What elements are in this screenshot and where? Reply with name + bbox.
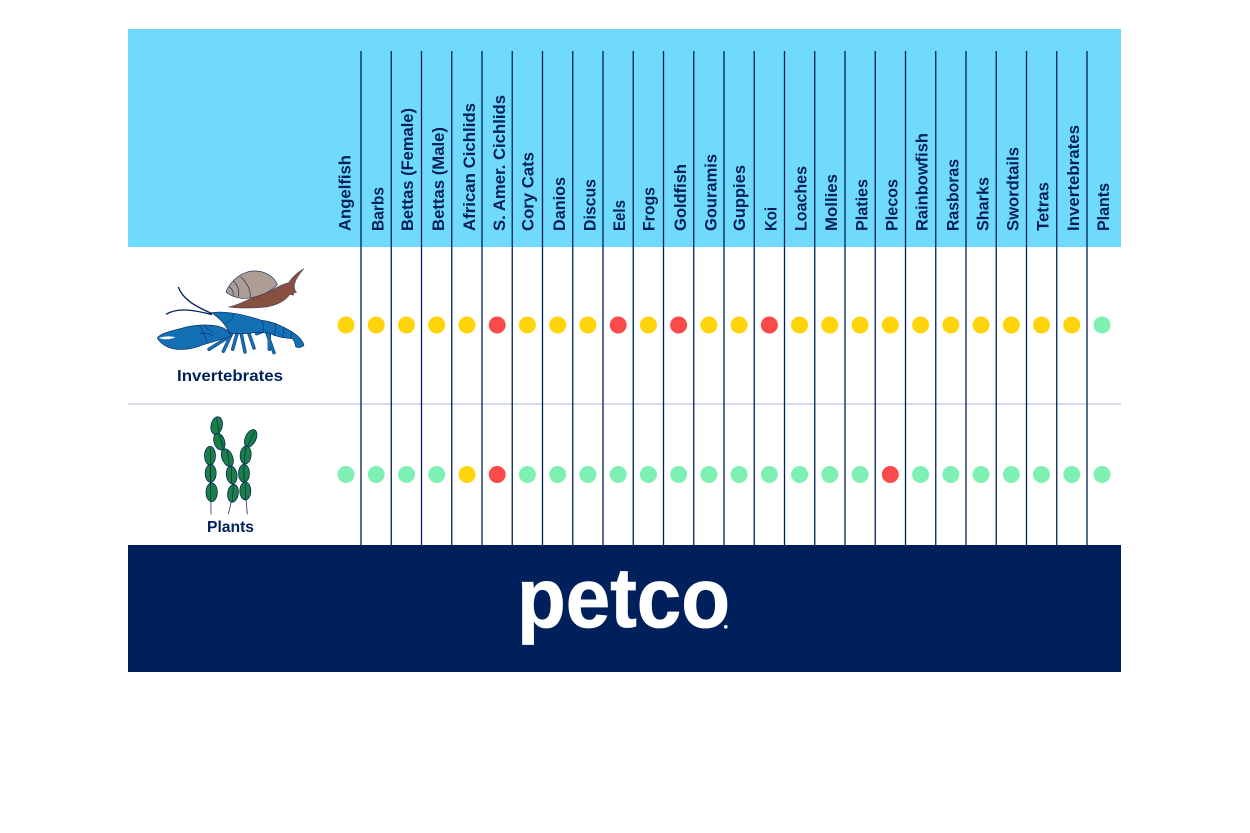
heading: Tetras: Tetras xyxy=(1034,182,1052,231)
heading: Cory Cats: Cory Cats xyxy=(519,152,537,231)
heading: Invertebrates: Invertebrates xyxy=(1065,125,1083,231)
heading: Gouramis: Gouramis xyxy=(702,154,720,231)
heading: Frogs: Frogs xyxy=(640,187,658,231)
heading: Mollies: Mollies xyxy=(823,174,841,231)
heading: Barbs: Barbs xyxy=(369,187,387,231)
heading: Platies: Platies xyxy=(853,179,871,231)
crayfish body xyxy=(212,312,304,348)
heading: Loaches: Loaches xyxy=(793,166,811,231)
heading: Danios: Danios xyxy=(551,177,569,231)
crayfish claw xyxy=(157,325,231,349)
logo: petco: petco xyxy=(517,551,730,645)
row: Plants compatibility dots xyxy=(338,466,1110,483)
crayfish legs xyxy=(209,327,274,353)
heading: Rainbowfish: Rainbowfish xyxy=(914,133,932,231)
heading: Koi: Koi xyxy=(763,207,781,231)
footer band xyxy=(128,545,1121,672)
header band xyxy=(128,29,1121,247)
heading: Discus: Discus xyxy=(582,179,600,231)
snail shell xyxy=(226,271,277,298)
heading: Angelfish: Angelfish xyxy=(337,155,355,231)
heading: Guppies: Guppies xyxy=(731,165,749,231)
heading: S. Amer. Cichlids: S. Amer. Cichlids xyxy=(491,95,509,231)
column headings xyxy=(337,95,1113,231)
heading: Plecos: Plecos xyxy=(883,179,901,231)
label: Plants: Plants xyxy=(207,519,254,536)
heading: Swordtails: Swordtails xyxy=(1004,147,1022,231)
crayfish antennae xyxy=(166,287,212,315)
row: Invertebrates compatibility dots xyxy=(338,316,1110,334)
icon: aquatic plants xyxy=(204,416,259,514)
heading: Eels: Eels xyxy=(611,200,629,231)
heading: African Cichlids: African Cichlids xyxy=(461,103,479,231)
heading: Bettas (Male): Bettas (Male) xyxy=(430,127,448,231)
heading: Plants: Plants xyxy=(1095,183,1113,231)
heading: Rasboras: Rasboras xyxy=(944,159,962,231)
heading: Bettas (Female): Bettas (Female) xyxy=(399,108,417,231)
heading: Goldfish: Goldfish xyxy=(672,164,690,231)
icon: snail and crayfish xyxy=(157,269,304,353)
snail body xyxy=(228,269,304,308)
label: Invertebrates: Invertebrates xyxy=(177,368,283,385)
heading: Sharks: Sharks xyxy=(974,177,992,231)
